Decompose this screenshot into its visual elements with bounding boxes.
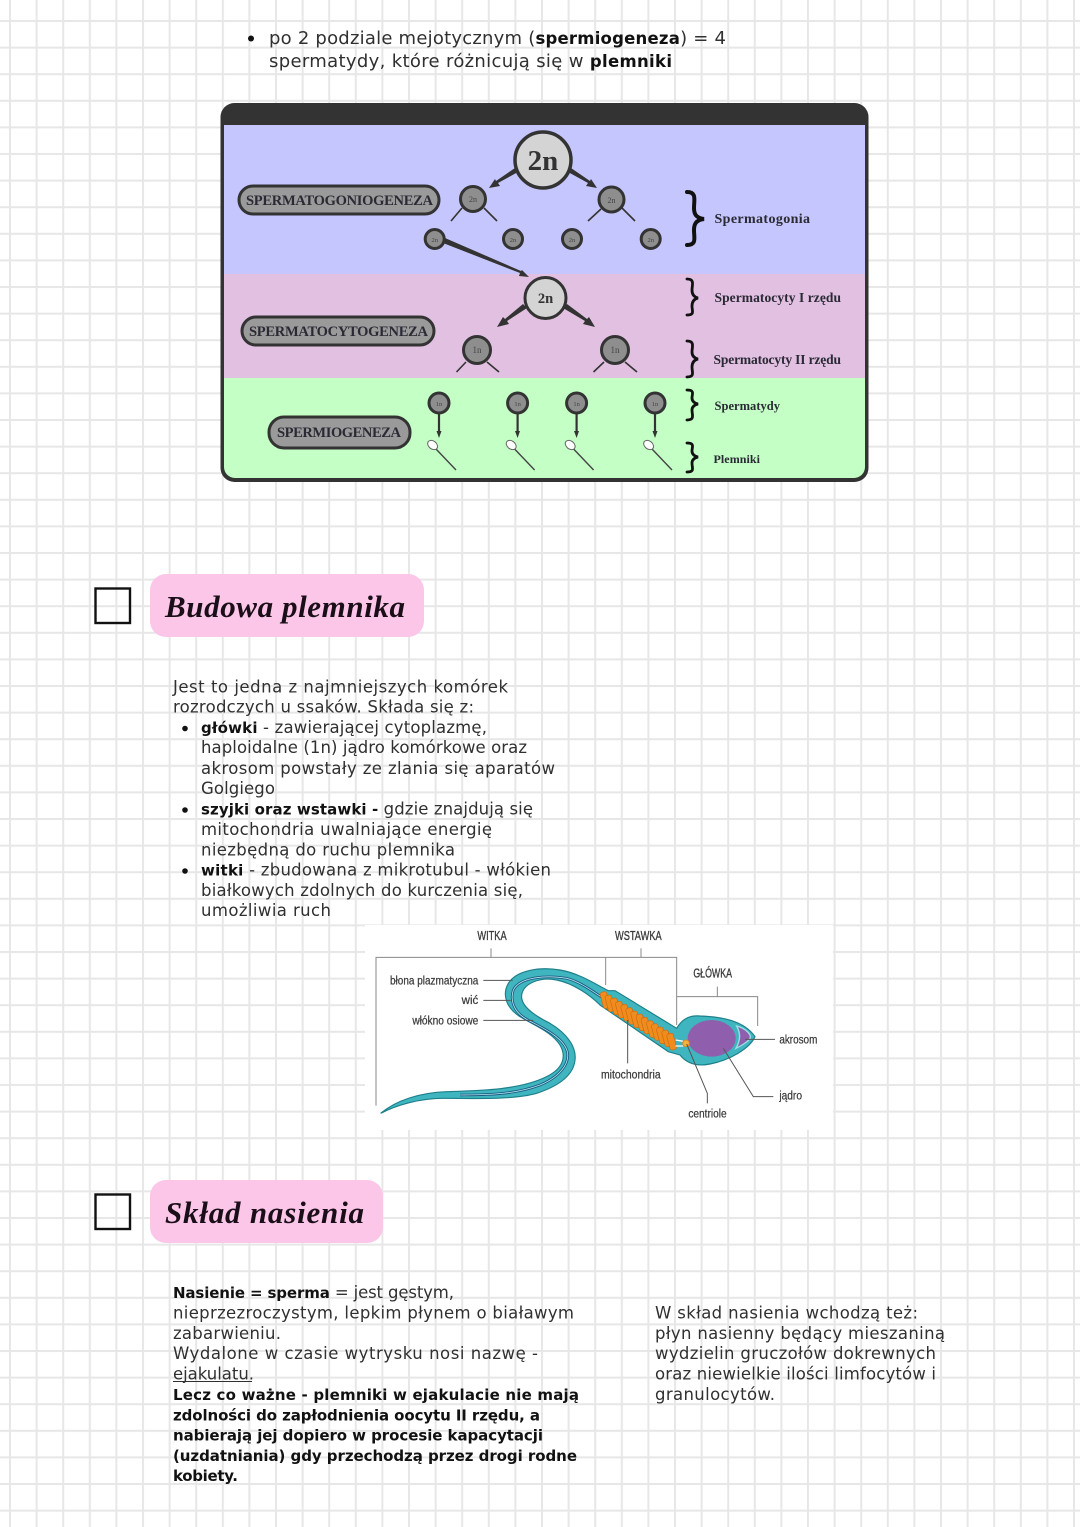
diagram: spermatogenesis stages: Spermatocyty II rzędu [714,352,841,367]
heading: Budowa plemnika: Budowa plemnika [164,589,405,624]
text block: sperm structure: Jest to jedna z najmniejszych komórek [172,678,508,696]
text block: spermiogenesis bullet: po 2 podziale mejotycznym (spermiogeneza) = 4 [269,28,726,49]
diagram: sperm anatomy: wić [461,993,478,1007]
diagram: sperm anatomy: WITKA [477,929,507,943]
diagram: spermatogenesis stages: 2n [647,237,655,244]
diagram: spermatogenesis stages: 2n [469,195,477,204]
diagram: spermatogenesis stages: 2n [510,237,517,244]
text block: semen definition: Nasienie = sperma = jest gęstym, [173,1283,454,1302]
text block: semen definition: zdolności do zapłodnienia oocytu II rzędu, a [173,1406,540,1424]
diagram: spermatogenesis stages: 1n [472,345,482,355]
diagram: spermatogenesis stages: 2n [528,145,558,177]
diagram: spermatogenesis stages: 2n [431,237,439,244]
text block: semen definition: zabarwieniu. [173,1324,281,1343]
checkbox: Skład nasienia [96,1194,130,1229]
text block: sperm structure: haploidalne (1n) jądro komórkowe oraz [201,738,527,757]
text block: sperm structure: witki - zbudowana z mikrotubul - włókien [201,860,551,880]
text block: semen composition: W skład nasienia wchodzą też: [655,1304,918,1322]
text block: sperm structure: rozrodczych u ssaków. Składa się z: [173,698,474,716]
text block: spermiogenesis bullet [248,28,726,72]
text block: sperm structure: Golgiego [201,779,275,798]
text block: spermiogenesis bullet: spermatydy, które różnicują się w plemniki [269,51,672,72]
heading: Skład nasienia [150,1180,383,1243]
text block: sperm structure: mitochondria uwalniające energię [201,820,492,839]
diagram: spermatogenesis stages: 1n [652,401,659,408]
diagram: spermatogenesis stages: 1n [610,345,620,355]
diagram: spermatogenesis stages: Spermatocyty I rzędu [714,290,841,305]
text block: semen definition: (uzdatniania) gdy przechodzą przez drogi rodne [173,1447,577,1465]
diagram: spermatogenesis stages: 1n [436,401,443,408]
text block: semen definition: ejakulatu. [173,1364,254,1384]
text block: sperm structure: umożliwia ruch [201,901,331,920]
text block: semen composition: oraz niewielkie ilości limfocytów i [655,1364,936,1384]
text block: sperm structure: akrosom powstały ze zlania się aparatów [201,759,555,778]
text block: sperm structure [172,678,555,920]
text block: semen definition: Wydalone w czasie wytrysku nosi nazwę - [173,1344,538,1363]
diagram: sperm anatomy: włókno osiowe [411,1013,479,1027]
diagram: spermatogenesis stages: 1n [573,401,581,408]
diagram: sperm anatomy: jądro [778,1088,802,1102]
diagram: sperm anatomy: błona plazmatyczna [390,973,479,987]
diagram: sperm anatomy [365,925,833,1130]
text block: semen composition: wydzielin gruczołów dokrewnych [655,1344,936,1363]
diagram: spermatogenesis stages: 2n [569,237,576,244]
text block: sperm structure: szyjki oraz wstawki - gdzie znajdują się [201,800,533,818]
text block: semen definition [173,1283,579,1485]
text block: semen definition: kobiety. [173,1467,238,1485]
text block: semen definition: nabierają jej dopiero w procesie kapacytacji [173,1426,543,1444]
diagram: spermatogenesis stages: Plemniki [714,452,761,466]
text block: semen definition: Lecz co ważne - plemniki w ejakulacie nie mają [173,1386,579,1404]
diagram: spermatogenesis stages: Spermatogonia [714,212,810,227]
diagram: sperm anatomy: GŁÓWKA [693,965,732,980]
diagram: spermatogenesis stages: SPERMIOGENEZA [277,425,402,441]
text block: sperm structure: główki - zawierającej cytoplazmę, [201,718,487,737]
diagram: sperm anatomy: WSTAWKA [615,929,662,943]
diagram: sperm anatomy: centriole [688,1106,727,1120]
diagram: spermatogenesis stages [220,103,868,482]
heading: Budowa plemnika [150,574,424,637]
diagram: spermatogenesis stages: 2n [538,291,553,307]
text block: sperm structure: białkowych zdolnych do kurczenia się, [201,881,523,900]
text block: semen composition: granulocytów. [655,1385,775,1404]
text block: semen definition: nieprzezroczystym, lepkim płynem o białawym [173,1304,574,1322]
checkbox: Budowa plemnika [96,588,130,623]
diagram: spermatogenesis stages: 2n [608,196,616,205]
heading: Skład nasienia: Skład nasienia [165,1195,364,1230]
diagram: sperm anatomy: akrosom [779,1032,817,1046]
text block: semen composition [655,1304,945,1404]
text block: sperm structure: niezbędną do ruchu plemnika [201,840,455,860]
diagram: spermatogenesis stages: SPERMATOGONIOGENEZA [246,193,434,209]
text block: semen composition: płyn nasienny będący mieszaniną [655,1324,945,1343]
diagram: sperm anatomy: mitochondria [601,1067,661,1081]
diagram: spermatogenesis stages: SPERMATOCYTOGENEZA [249,324,429,340]
diagram: spermatogenesis stages: 1n [514,401,522,408]
diagram: spermatogenesis stages: Spermatydy [714,399,781,413]
